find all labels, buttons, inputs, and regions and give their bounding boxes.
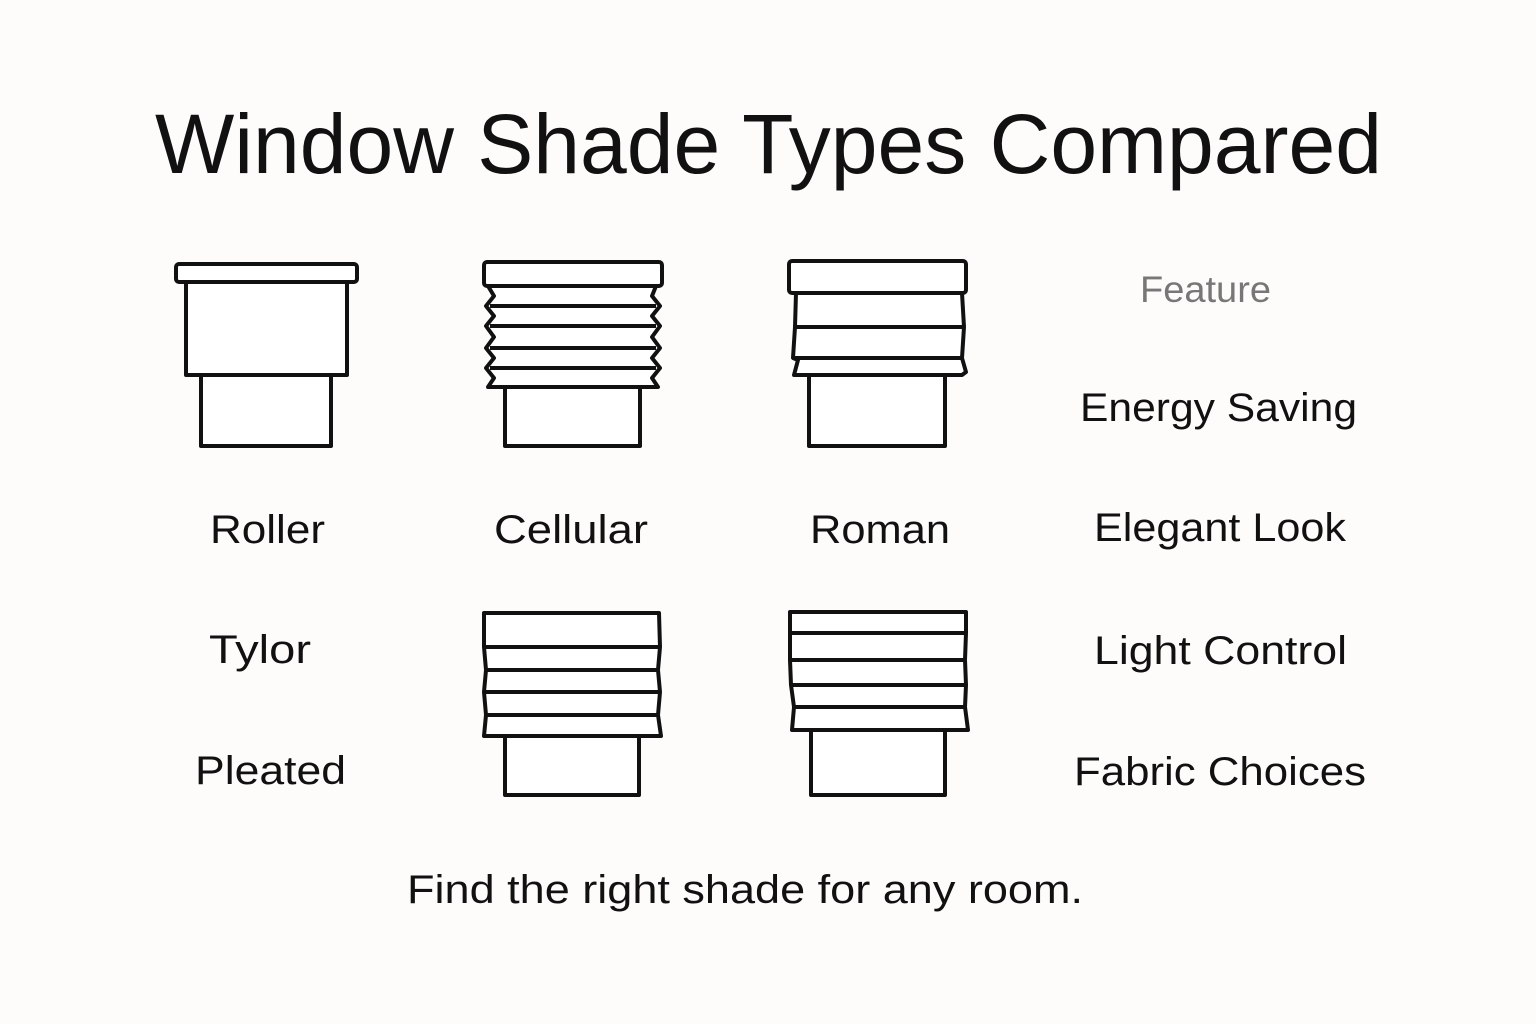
title: Window Shade Types Compared [155, 97, 1382, 191]
feature: Elegant Look: Elegant Look [1094, 506, 1347, 550]
icon: tiered shade (bottom right) [790, 612, 968, 795]
label: Roller: Roller [210, 508, 325, 552]
feature: Light Control: Light Control [1094, 629, 1347, 673]
feature: Fabric Choices: Fabric Choices [1074, 750, 1366, 794]
label: Cellular: Cellular [494, 508, 648, 552]
icon: roller shade [176, 264, 357, 446]
icon: roman shade [789, 261, 966, 446]
footer tagline: Find the right shade for any room. [407, 868, 1083, 912]
feature: Energy Saving: Energy Saving [1080, 386, 1357, 430]
label: Pleated: Pleated [195, 749, 346, 793]
feature header: Feature [1140, 269, 1271, 310]
label: Roman: Roman [810, 508, 950, 552]
label: Tylor: Tylor [209, 628, 311, 672]
icon: pleated shade (bottom middle) [484, 613, 661, 795]
icon: cellular shade [484, 262, 662, 446]
